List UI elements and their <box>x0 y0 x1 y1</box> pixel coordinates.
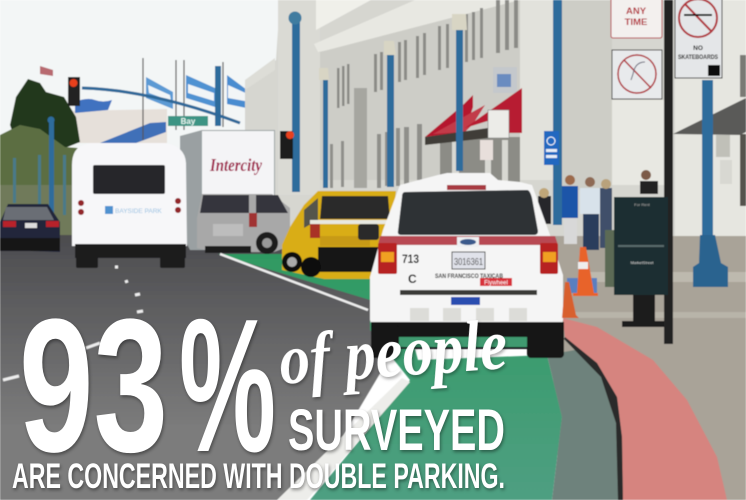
sign: no skateboards: SKATEBOARDS <box>678 54 719 61</box>
sign: no roller skating <box>612 50 662 99</box>
photo: street poles <box>48 0 728 287</box>
sign: accessible parking <box>544 131 559 165</box>
photo: pedestrians <box>538 170 658 250</box>
photo: road surface <box>0 235 385 500</box>
photo: white SUV taxi: 713 <box>402 252 419 266</box>
photo: white SUV taxi <box>358 173 564 358</box>
sign: no skateboards <box>675 0 722 78</box>
headline: surveyed: SURVEYED <box>288 398 505 463</box>
sign: any time parking notice: TIME <box>625 17 647 28</box>
photo: silver minivan <box>197 194 290 254</box>
photo: black sign pole and news rack: MarketStreet <box>631 260 654 265</box>
photo: box truck <box>180 130 275 250</box>
photo: background trees and pier building <box>0 79 167 235</box>
photo: grey gutter beside the lane <box>547 350 621 500</box>
photo: yellow taxi <box>282 191 396 279</box>
photo: white shuttle bus: BAYSIDE PARK <box>115 208 162 215</box>
photo: white SUV taxi: Flywheel <box>484 280 508 286</box>
sign: any time parking notice: ANY <box>626 6 647 17</box>
photo: traffic cones <box>562 247 598 318</box>
photo: flags and banners <box>40 58 251 140</box>
photo: white SUV taxi: C <box>408 272 417 286</box>
headline: are concerned with double parking: ARE CONCERNED WITH DOUBLE PARKING. <box>12 457 505 496</box>
photo: white shuttle bus <box>72 143 187 268</box>
photo: red awnings <box>425 88 522 160</box>
photo: kerb in red paint <box>563 318 727 500</box>
photo: blue ground patch and sidewalk sign <box>567 230 617 293</box>
photo: traffic lights and street sign <box>68 77 294 159</box>
sign: any time parking notice <box>611 0 662 38</box>
percent sign: % <box>179 280 276 492</box>
photo: lane markings <box>3 254 410 500</box>
photo: white SUV taxi: SAN FRANCISCO TAXICAB <box>435 273 503 280</box>
sign: no skateboards: NO <box>693 45 703 52</box>
headline: of people: of people <box>277 304 510 400</box>
photo: sidewalk <box>545 236 746 500</box>
headline: 93%: 93 <box>19 280 168 492</box>
photo: box truck: Intercity <box>209 155 263 175</box>
photo: traffic lights and street sign: Bay <box>181 117 196 126</box>
photo: dark blue sedan <box>0 204 60 252</box>
photo: black sign pole and news rack: For Rent <box>634 202 651 207</box>
photo: sky <box>0 0 746 260</box>
photo: white SUV taxi: 3016361 <box>454 257 483 268</box>
photo: white building facade <box>245 0 746 240</box>
photo: green bike lane <box>218 254 562 500</box>
photo: black sign pole and news rack <box>614 0 673 344</box>
